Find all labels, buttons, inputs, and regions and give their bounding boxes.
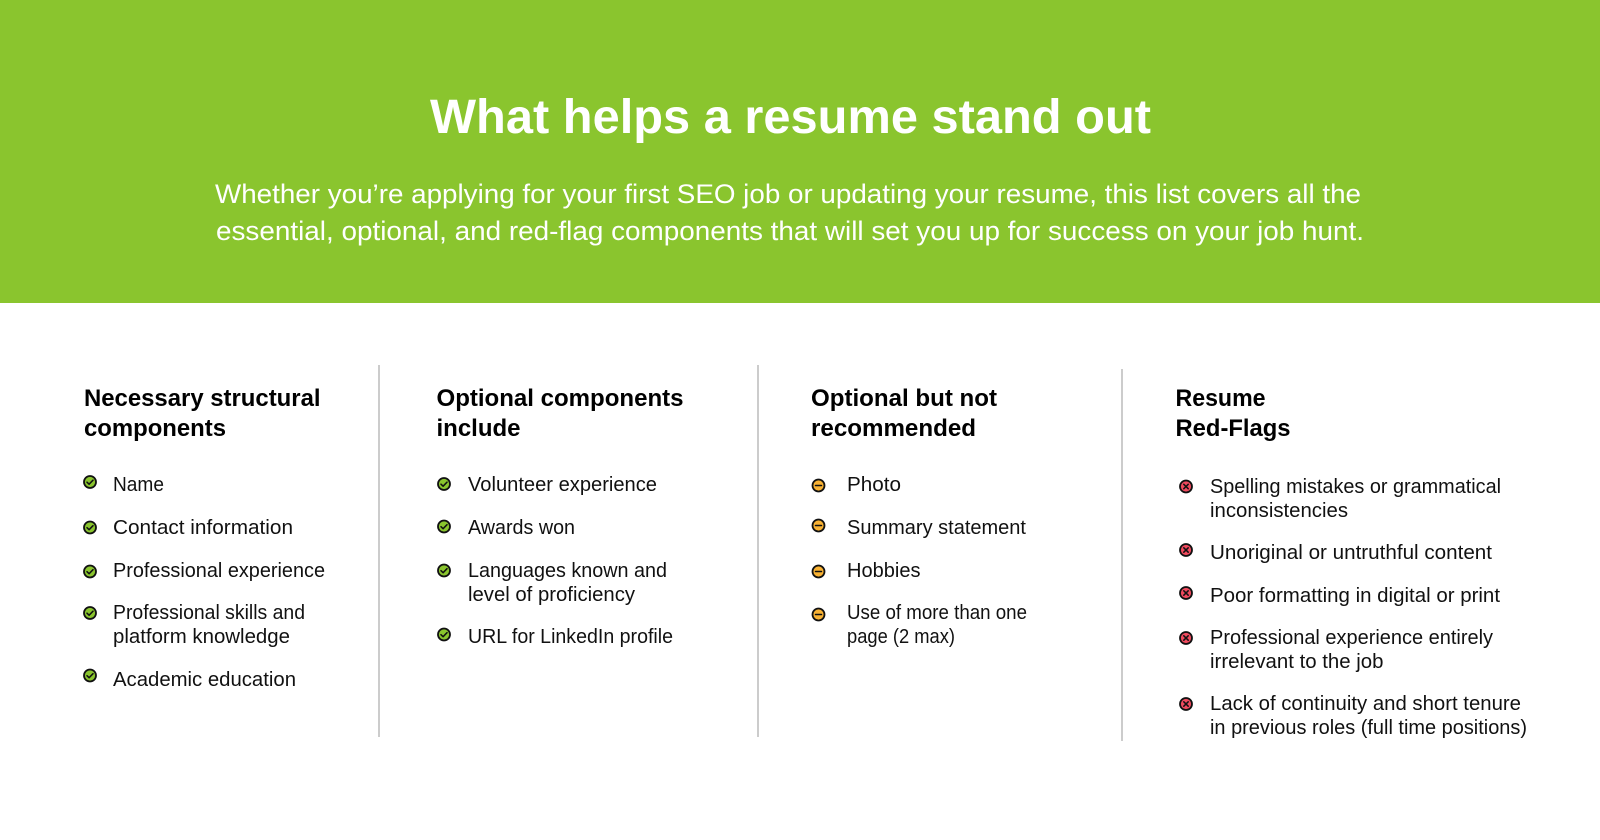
heading: red-flags: Resume	[1176, 385, 1266, 412]
heading: optional: include	[436, 415, 520, 442]
list: not recommended items: Summary statement	[847, 517, 1026, 539]
list: necessary items	[84, 474, 325, 691]
heading: necessary	[84, 385, 320, 442]
list: red-flag items: Poor formatting in digital or print	[1210, 585, 1500, 607]
heading: red-flags	[1176, 385, 1290, 442]
list: optional items: Awards won	[468, 517, 575, 539]
heading: not recommended: Optional but not	[811, 385, 997, 412]
panel: necessary structural components	[84, 385, 325, 691]
list: not recommended items: page (2 max)	[847, 626, 955, 648]
list: red-flag items: Professional experience entirely	[1210, 627, 1493, 649]
list: optional items: URL for LinkedIn profile	[468, 626, 673, 648]
subtitle	[215, 179, 1364, 246]
list: necessary items: Professional experience	[113, 560, 325, 582]
title: What helps a resume stand out	[430, 91, 1151, 144]
list: necessary items: Name	[113, 474, 164, 496]
list: not recommended items: Photo	[847, 474, 901, 496]
heading: red-flags: Red-Flags	[1176, 415, 1290, 442]
heading: optional: Optional components	[436, 385, 684, 412]
list: necessary items: Academic education	[113, 669, 296, 691]
list: necessary items: Professional skills and	[113, 602, 305, 624]
list: not recommended items	[812, 474, 1027, 648]
subtitle: essential, optional, and red-flag components that will set you up for success on your job hunt.	[216, 216, 1364, 246]
list: not recommended items: Use of more than one	[847, 602, 1027, 624]
list: optional items: level of proficiency	[468, 584, 635, 606]
list: not recommended items: Hobbies	[847, 560, 920, 582]
panel: resume red-flags	[1176, 385, 1527, 739]
subtitle: Whether you’re applying for your first SEO job or updating your resume, this list covers all the	[215, 179, 1361, 209]
list: red-flag items: in previous roles (full time positions)	[1210, 717, 1527, 739]
list: red-flag items	[1180, 476, 1527, 739]
list: red-flag items: inconsistencies	[1210, 500, 1348, 522]
heading: not recommended	[811, 385, 997, 442]
list: optional items	[438, 474, 673, 648]
list: red-flag items: Spelling mistakes or grammatical	[1210, 476, 1501, 498]
list: red-flag items: Unoriginal or untruthful content	[1210, 542, 1492, 564]
list: necessary items: Contact information	[113, 517, 293, 539]
list: red-flag items: irrelevant to the job	[1210, 651, 1384, 673]
heading: optional	[436, 385, 684, 442]
list: red-flag items: Lack of continuity and short tenure	[1210, 693, 1521, 715]
header band	[0, 0, 1600, 303]
list: necessary items: platform knowledge	[113, 626, 290, 648]
panel: optional components	[436, 385, 684, 648]
panel: optional but not recommended	[811, 385, 1027, 648]
heading: necessary: Necessary structural	[84, 385, 320, 412]
list: optional items: Languages known and	[468, 560, 667, 582]
list: optional items: Volunteer experience	[468, 474, 657, 496]
heading: necessary: components	[84, 415, 226, 442]
heading: not recommended: recommended	[811, 415, 976, 442]
